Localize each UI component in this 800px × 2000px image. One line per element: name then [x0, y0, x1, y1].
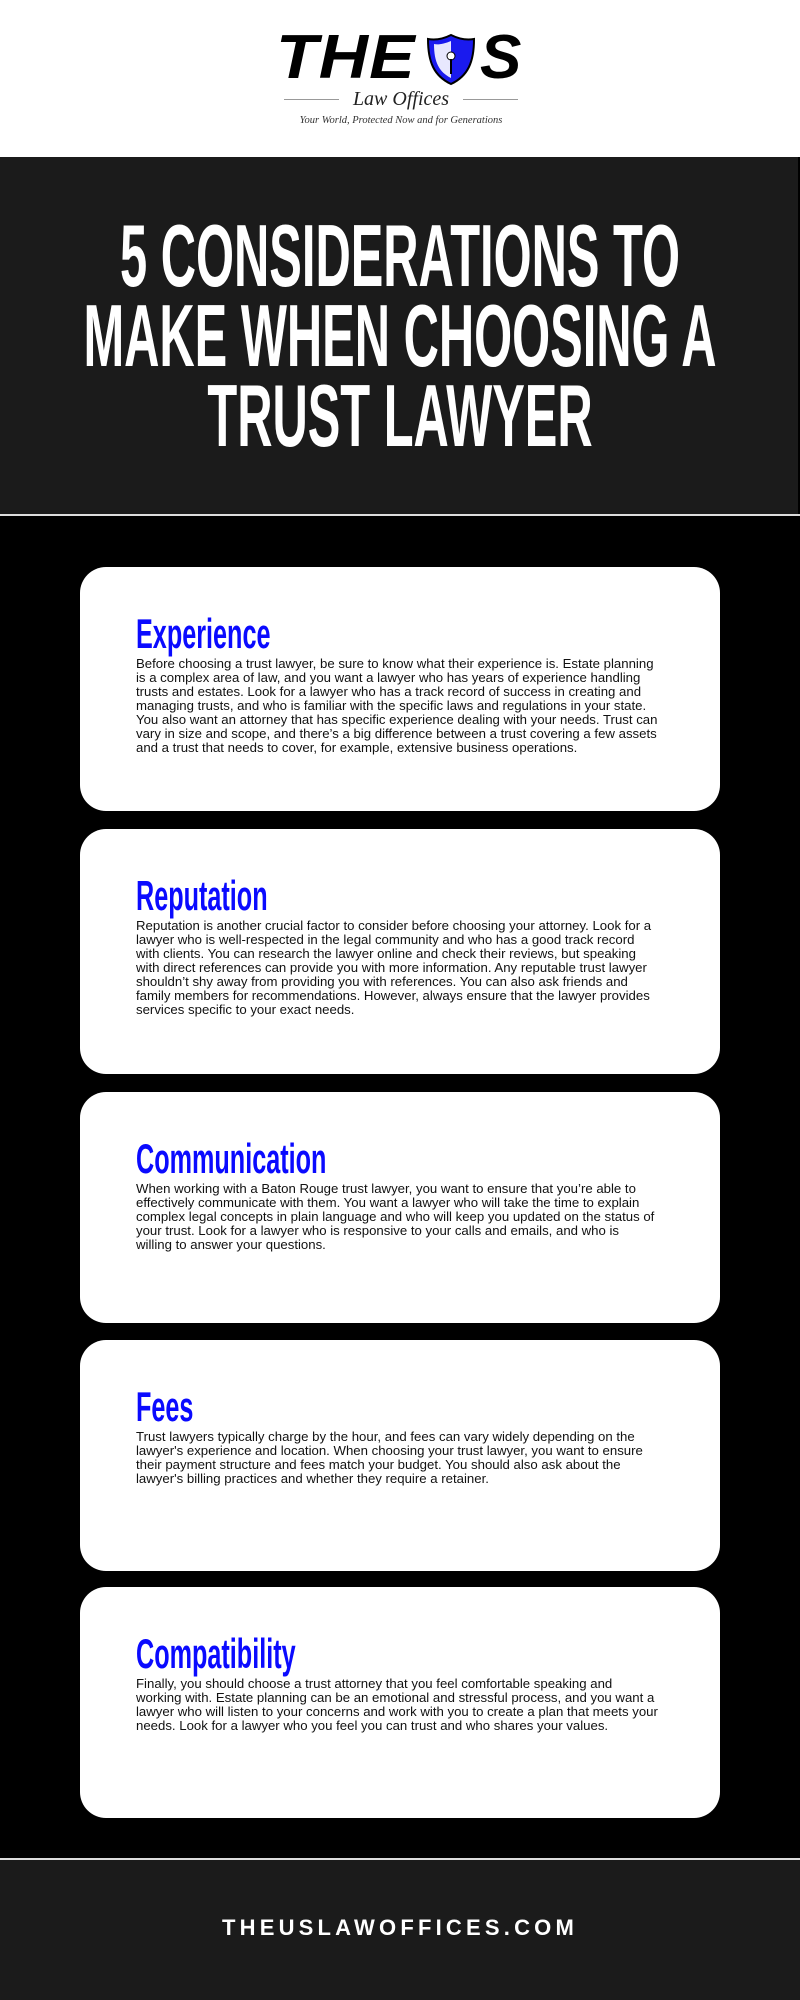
card: compatibility: Compatibility — [136, 1630, 296, 1677]
card: compatibility: Finally, you should choose a trust attorney that you feel comfortable speaking and working with. Estate planning can be an emotional and stressful process, and you want a lawyer who will listen to your concerns and work with you to create a plan that meets your needs. Look for a lawyer who you feel you can trust and who shares your values. — [136, 1676, 658, 1733]
card: reputation: Reputation — [136, 872, 268, 919]
tagline: Your World, Protected Now and for Generations — [300, 115, 502, 126]
logo — [276, 23, 522, 126]
card: reputation — [80, 829, 720, 1074]
title: 5 CONSIDERATIONS TO — [120, 206, 680, 305]
title: MAKE WHEN CHOOSING A — [83, 286, 717, 385]
card: reputation: Reputation is another crucial factor to consider before choosing your attorney. Look for a lawyer who is well-respected in the legal community and who has a good track record with clients. You can research the lawyer online and check their reviews, but speaking with direct references can provide you with more information. Any reputable trust lawyer shouldn’t shy away from providing you with references. You can also ask friends and family members for recommendations. However, always ensure that the lawyer provides services specific to your exact needs. — [136, 918, 651, 1017]
card: experience — [80, 567, 720, 811]
card: communication: Communication — [136, 1135, 326, 1182]
footer url: THEUSLAWOFFICES.COM — [222, 1915, 578, 1940]
card: fees — [80, 1340, 720, 1571]
footer — [0, 1860, 800, 2000]
title — [83, 206, 717, 465]
card: experience: Before choosing a trust lawyer, be sure to know what their experience is. Estate planning is a complex area of law, and you want a lawyer who has years of experience handling trusts and estates. Look for a lawyer who has a track record of success in creating and managing trusts, and who is familiar with the specific laws and regulations in your state. You also want an attorney that has specific experience dealing with your needs. Trust can vary in size and scope, and there’s a big difference between a trust covering a few assets and a trust that needs to cover, for example, extensive business operations. — [136, 656, 657, 755]
card: fees: Trust lawyers typically charge by the hour, and fees can vary widely depending on the lawyer's experience and location. When choosing your trust lawyer, you want to ensure their payment structure and fees match your budget. You should also ask about the lawyer's billing practices and whether they require a retainer. — [136, 1429, 643, 1486]
logo wordmark: THE — [276, 23, 416, 92]
logo subtitle: Law Offices — [353, 88, 449, 110]
title band — [0, 157, 798, 514]
icon: shield — [427, 34, 475, 86]
card: communication — [80, 1092, 720, 1323]
title: TRUST LAWYER — [207, 366, 593, 465]
card: experience: Experience — [136, 610, 270, 657]
header logo band — [0, 0, 800, 157]
card: communication: When working with a Baton Rouge trust lawyer, you want to ensure that you’re able to effectively communicate with them. You want a lawyer who will take the time to explain complex legal concepts in plain language and who will keep you updated on the status of your trust. Look for a lawyer who is responsive to your calls and emails, and who is willing to answer your questions. — [136, 1181, 654, 1252]
card: compatibility — [80, 1587, 720, 1818]
logo wordmark — [276, 23, 522, 92]
logo wordmark: S — [480, 23, 522, 92]
card: fees: Fees — [136, 1383, 193, 1430]
